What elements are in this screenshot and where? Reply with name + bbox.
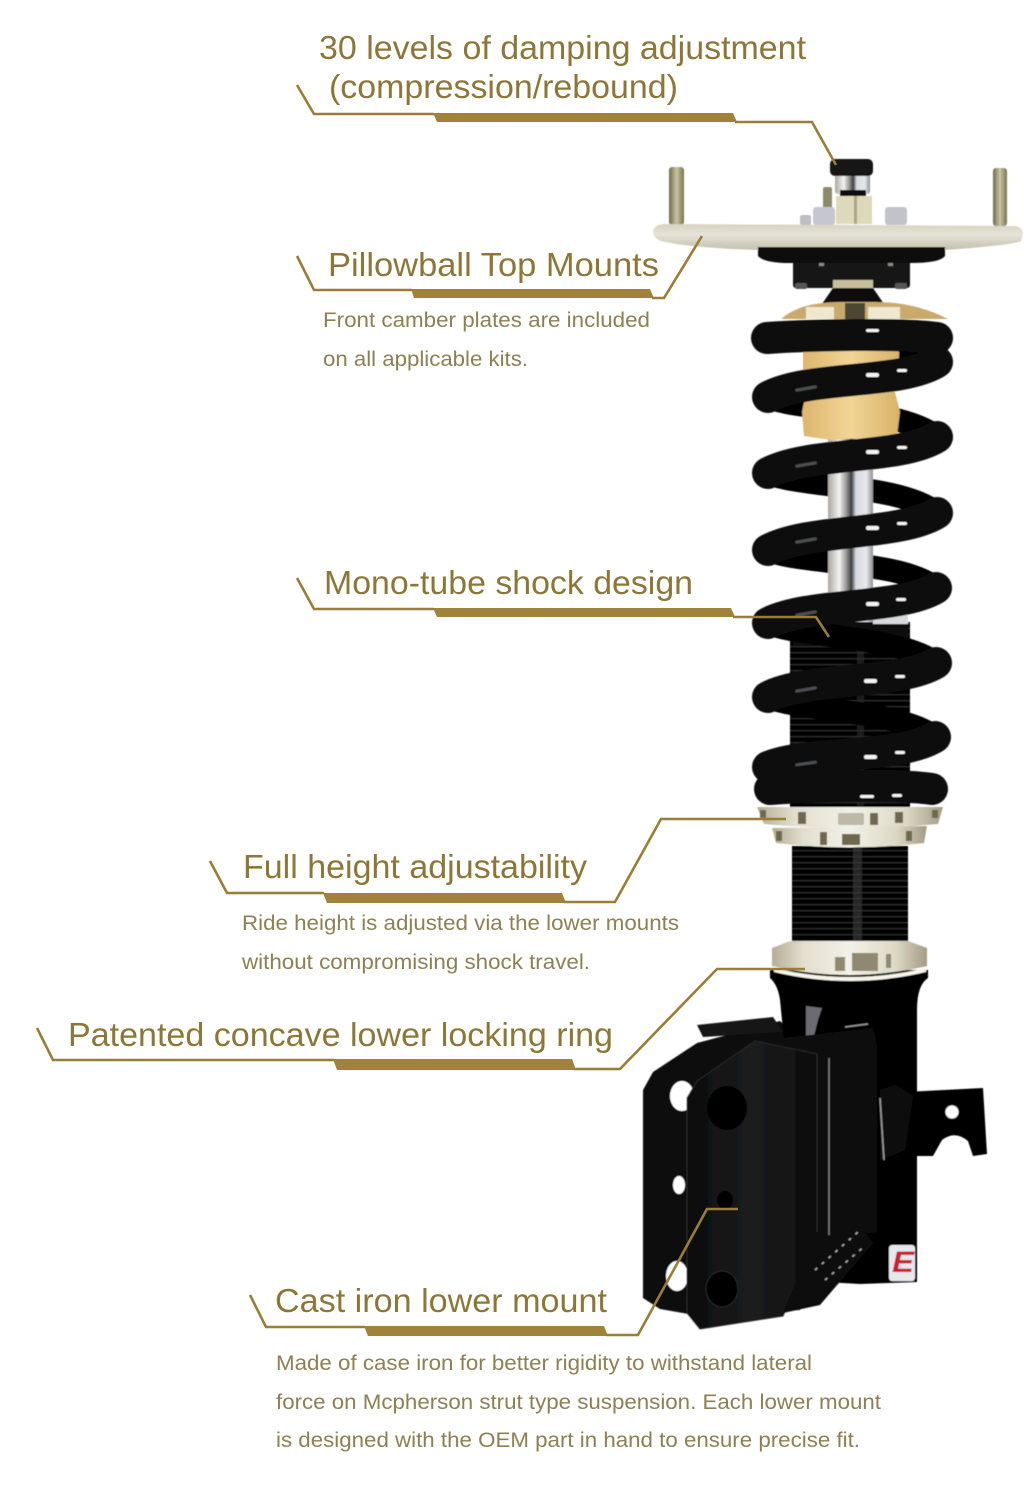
description: ride height: without compromising shock travel.: [241, 951, 590, 974]
heading: pillowball top mounts: Pillowball Top Mounts: [328, 246, 659, 283]
logo badge: E: [892, 1246, 915, 1279]
tab gusset: [880, 1085, 913, 1160]
front coil strands: [767, 335, 937, 789]
callout: concave locking ring: [37, 969, 805, 1070]
upper spring perch ring: [757, 807, 943, 828]
leader line: perch ring: [210, 819, 786, 903]
description: cast iron: [276, 1352, 881, 1452]
heading: mono-tube: Mono-tube shock design: [324, 564, 693, 601]
description: camber plates: on all applicable kits.: [323, 348, 528, 371]
heading: damping adjustment: 30 levels of damping adjustment: [319, 29, 806, 66]
description: cast iron: is designed with the OEM part in hand to ensure precise fit.: [276, 1429, 860, 1452]
strut body: [770, 970, 928, 1284]
lower mount bracket rear plate: [643, 1021, 800, 1316]
back coil strands: [767, 336, 937, 737]
pillowball top plate: [653, 224, 1023, 250]
heading: locking ring: Patented concave lower locking ring: [68, 1016, 613, 1053]
leader line: lower mount: [250, 1209, 738, 1336]
strut tab: [905, 1088, 987, 1156]
pillowball and spring seat: [781, 280, 948, 319]
heading: cast iron: Cast iron lower mount: [275, 1282, 607, 1319]
description: cast iron: force on Mcpherson strut type suspension. Each lower mount: [276, 1391, 881, 1414]
chrome piston rod: [828, 436, 873, 622]
tab hole: [945, 1105, 959, 1119]
description: ride height: Ride height is adjusted via the lower mounts: [242, 912, 679, 935]
welded channel arm: [757, 1028, 877, 1240]
top-mount black disc: [758, 247, 945, 263]
bump stop: [802, 345, 900, 440]
weld gusset: [783, 1222, 873, 1313]
callout: damping adjustment: [297, 29, 836, 165]
callout: pillowball top mounts: [297, 236, 702, 371]
heading: damping adjustment: [319, 29, 806, 105]
front plate holes: [706, 1086, 747, 1307]
description: ride height: [241, 912, 679, 974]
lower threaded shock body: [790, 622, 910, 946]
leader line: shock body: [297, 578, 829, 637]
weld highlights: [815, 1024, 884, 1280]
leader line: top mounts: [297, 236, 702, 298]
lower locking ring: [772, 941, 927, 981]
leader line: damping adjuster: [297, 85, 836, 165]
top plate studs: [669, 167, 1007, 226]
damping adjuster knob: [800, 159, 907, 225]
callout: cast iron lower mount: [250, 1209, 881, 1452]
rod collar highlight: [873, 612, 908, 624]
description: cast iron: Made of case iron for better rigidity to withstand lateral: [276, 1352, 812, 1375]
coilover shock assembly: [643, 159, 1023, 1329]
upper locking ring: [772, 826, 927, 848]
neck reflection: [806, 1006, 822, 1036]
bracket rear holes: [666, 1081, 694, 1291]
heading: full height: Full height adjustability: [243, 848, 588, 885]
lower mount front plate: [687, 1041, 817, 1329]
coil highlights: [795, 329, 907, 798]
leader line: locking ring: [37, 969, 805, 1070]
top flange: [697, 1017, 783, 1037]
callout: full height adjustability: [210, 819, 786, 974]
description: camber plates: [323, 309, 650, 371]
heading: damping adjustment: (compression/rebound): [329, 68, 678, 105]
description: camber plates: Front camber plates are included: [323, 309, 650, 332]
callout: mono-tube shock design: [297, 564, 829, 637]
lower top-mount drum: [793, 258, 910, 289]
